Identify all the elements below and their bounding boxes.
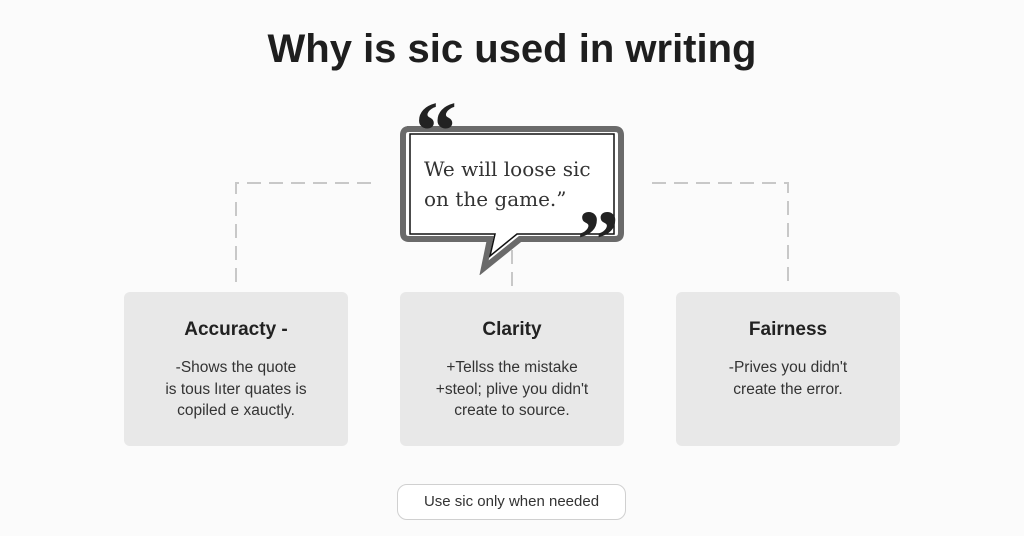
card: accuracy: copiled e xauctly.	[177, 402, 295, 419]
card: fairness: create the error.	[733, 380, 843, 398]
card: accuracy: Accuracty -	[184, 319, 288, 340]
card: fairness	[676, 292, 900, 446]
card: clarity: Clarity	[482, 319, 542, 340]
card: accuracy: is tous lıter quates is	[165, 380, 307, 398]
speech bubble: We will loose sic	[424, 157, 591, 181]
card: fairness: Fairness	[749, 319, 827, 340]
card: clarity: +steol; plive you didn't	[436, 380, 588, 398]
card: clarity	[400, 292, 624, 446]
button note	[397, 484, 626, 520]
speech bubble: on the game.”	[424, 187, 566, 211]
title: Why is sic used in writing	[268, 27, 756, 71]
card: fairness: -Prives you didn't	[729, 359, 847, 376]
card: clarity: create to source.	[454, 402, 570, 419]
button note: Use sic only when needed	[424, 493, 599, 510]
speech bubble	[400, 100, 624, 275]
card: accuracy	[124, 292, 348, 446]
card: clarity: +Tellss the mistake	[446, 359, 578, 376]
card: accuracy: -Shows the quote	[176, 359, 296, 376]
